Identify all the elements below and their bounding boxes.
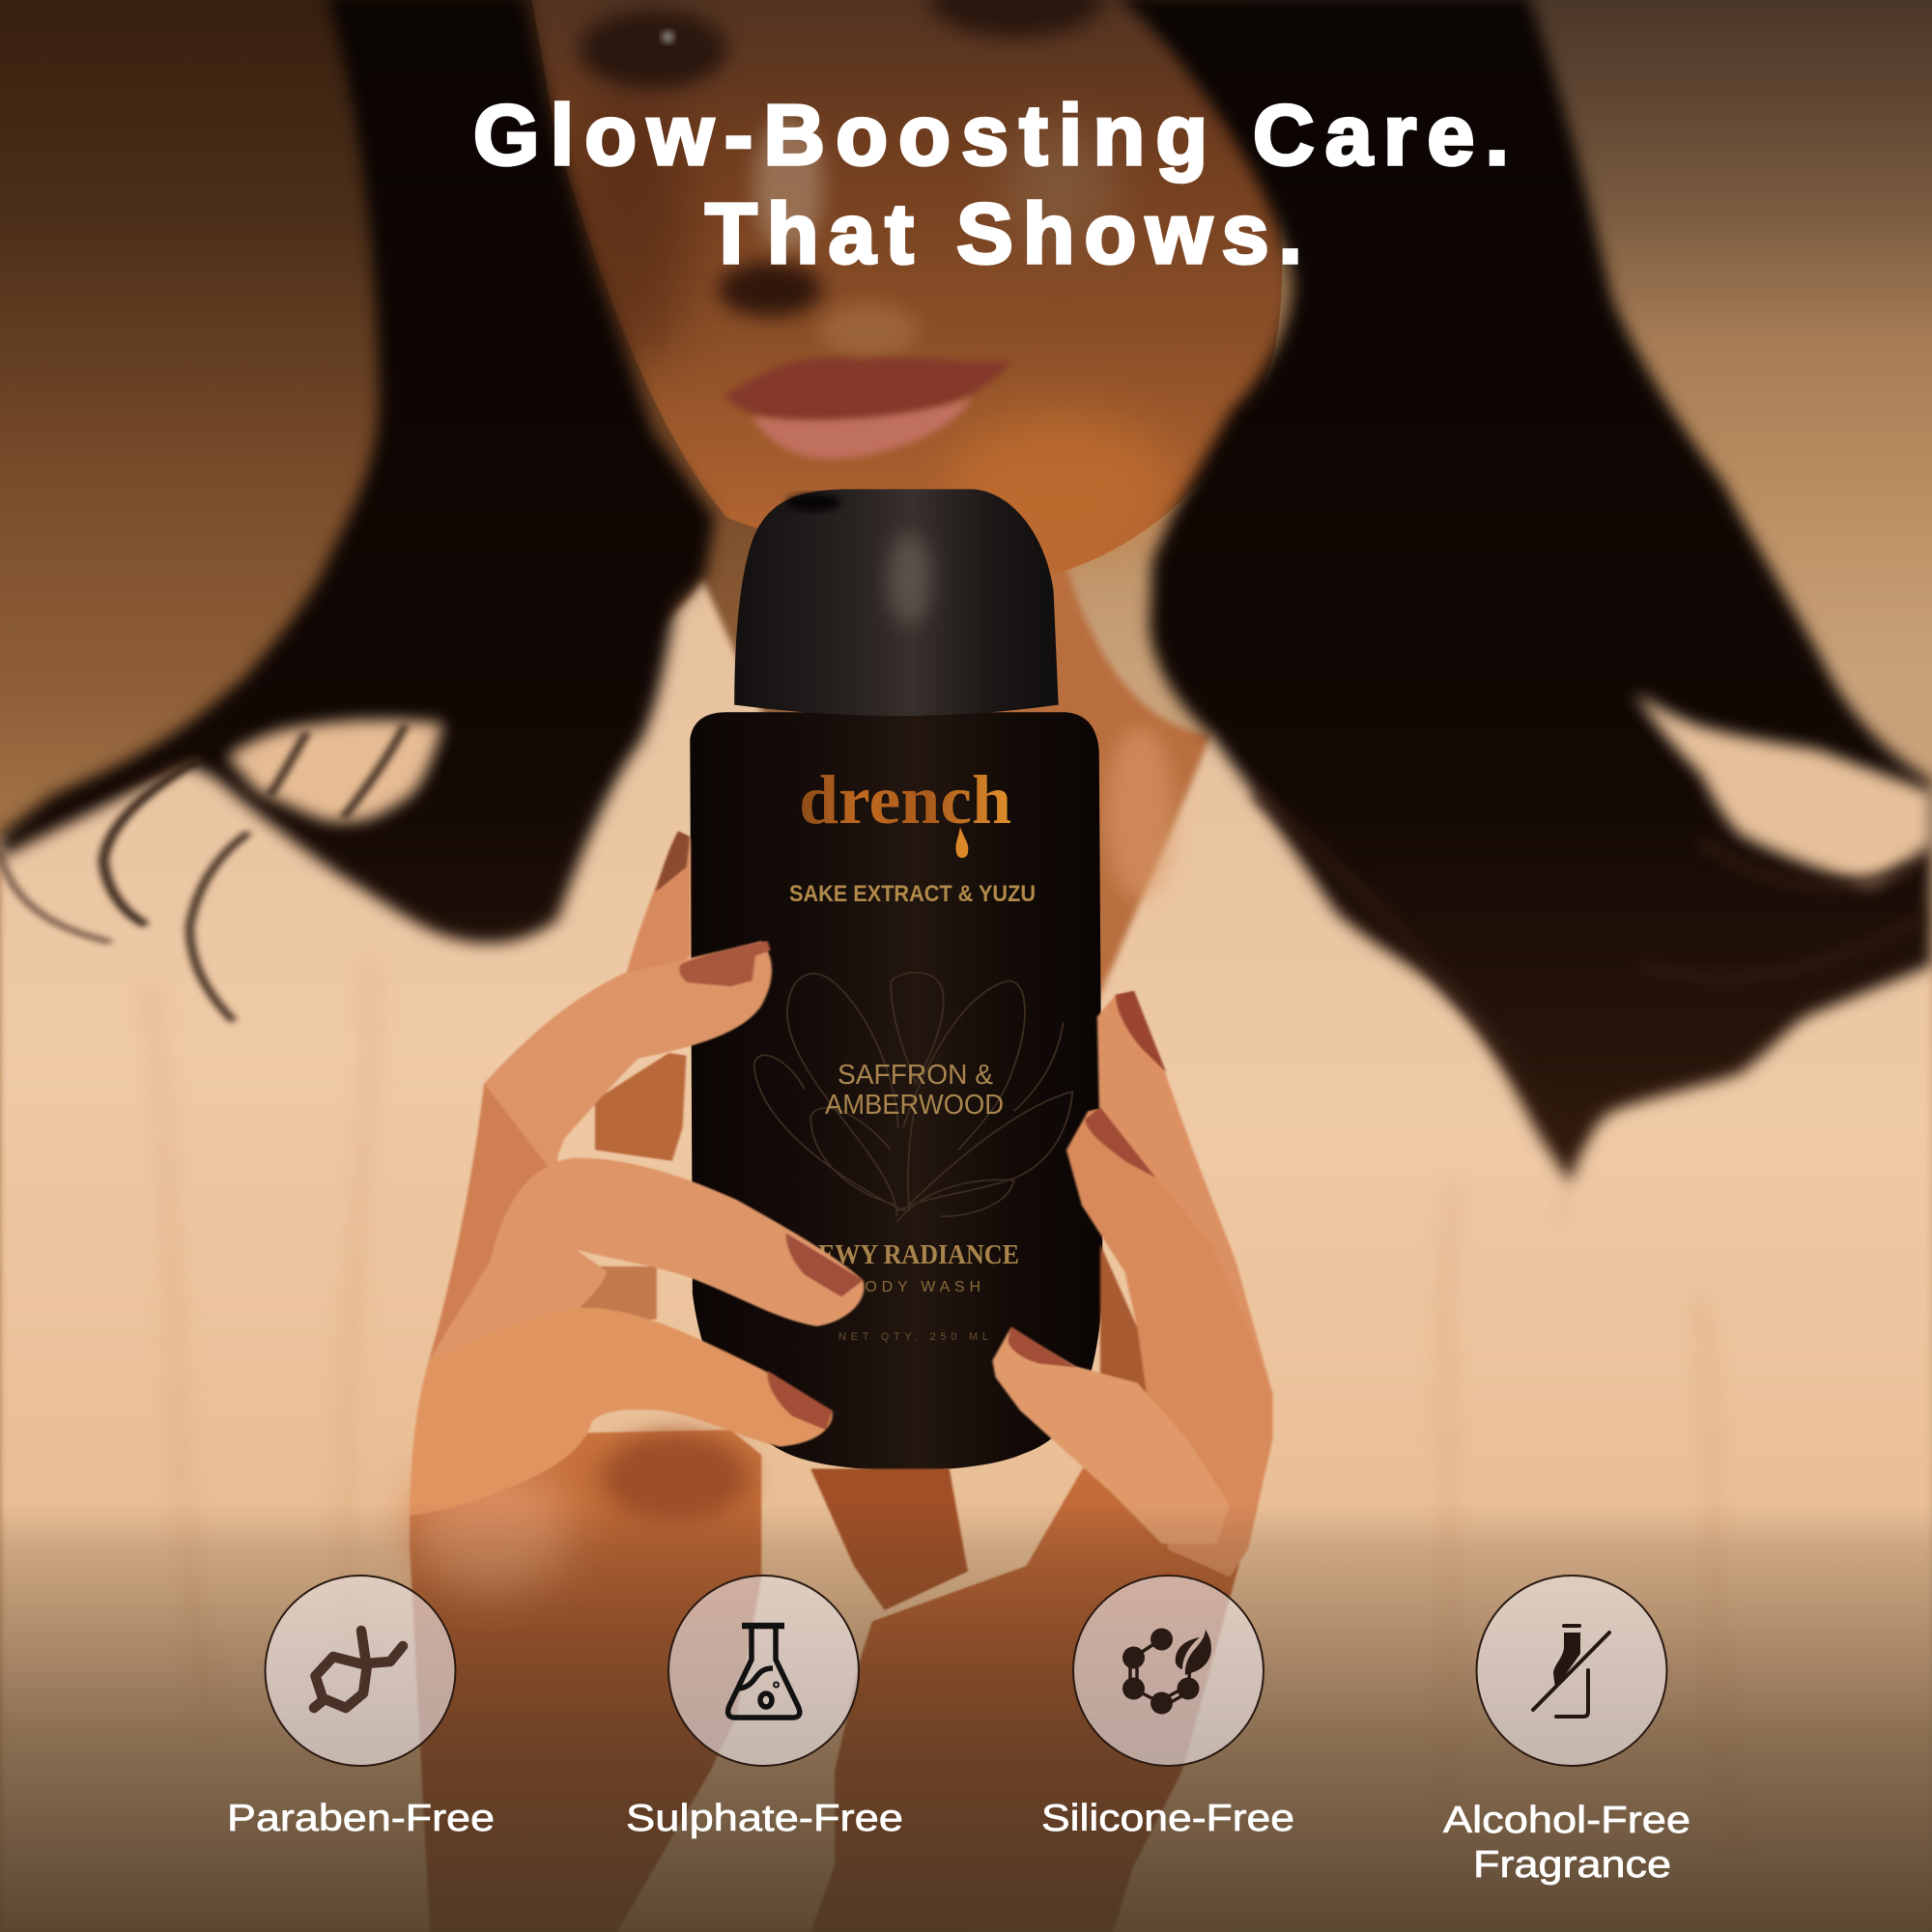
left ring finger <box>411 1308 833 1516</box>
badge circle <box>668 1576 859 1766</box>
icon: molecule with leaf <box>1122 1629 1211 1714</box>
label: Paraben-Free <box>227 1798 495 1839</box>
feature: silicone-free <box>1041 1576 1294 1839</box>
right hand lower palm <box>810 1438 1273 1932</box>
feature: sulphate-free <box>626 1576 903 1839</box>
right hand shadow <box>1100 1244 1180 1438</box>
left ring nail <box>767 1371 833 1430</box>
product type: BODY WASH <box>850 1279 980 1295</box>
right hair gap showing robe <box>1634 693 1932 886</box>
badge circle <box>1476 1576 1667 1766</box>
bottle <box>690 489 1103 1470</box>
right hair mass <box>1115 0 1932 1227</box>
neck and chest <box>788 493 1210 1060</box>
bottle label text <box>789 761 1036 1343</box>
badge circle <box>265 1576 456 1766</box>
face <box>529 0 1282 579</box>
feature: alcohol-free fragrance <box>1443 1576 1690 1886</box>
right middle finger <box>1066 1108 1273 1577</box>
icon: molecule <box>314 1631 403 1708</box>
brand name: drench <box>799 761 1011 838</box>
left hand lower palm <box>410 1430 761 1932</box>
right lower nail <box>1008 1326 1075 1367</box>
fragrance line 1: SAFFRON & <box>838 1060 993 1091</box>
finger behind bottle with long nail <box>626 831 691 978</box>
net quantity: NET QTY. 250 ML <box>838 1331 988 1343</box>
left hand back <box>429 1083 558 1361</box>
finger under bottle <box>810 1468 968 1610</box>
title line 1: Glow-Boosting Care. <box>473 87 1509 183</box>
right lower finger <box>992 1327 1230 1544</box>
title <box>473 87 1509 281</box>
white robe <box>0 579 1932 1932</box>
right hair highlights <box>1256 792 1922 1140</box>
icon: crossed-out bottle <box>1533 1624 1609 1717</box>
right upper finger <box>1097 992 1273 1438</box>
feature: paraben-free <box>227 1576 495 1839</box>
right middle nail <box>1085 1107 1155 1178</box>
label line 2: Fragrance <box>1473 1844 1671 1886</box>
label: Sulphate-Free <box>626 1798 903 1839</box>
bottle body <box>690 712 1103 1470</box>
left index nail <box>679 941 771 986</box>
ingredient line: SAKE EXTRACT & YUZU <box>789 881 1036 907</box>
label: Silicone-Free <box>1041 1798 1294 1839</box>
hair <box>0 0 1932 1227</box>
left hair gap showing robe <box>227 720 443 822</box>
finger behind index <box>595 1053 686 1161</box>
lips <box>724 357 1012 423</box>
hands holding bottle <box>410 831 1273 1932</box>
icon: flask <box>728 1626 800 1718</box>
label line 1: Alcohol-Free <box>1443 1800 1690 1841</box>
saffron flower line art <box>754 973 1072 1222</box>
brand drip <box>955 827 968 858</box>
bottle cap <box>734 489 1059 716</box>
fragrance line 2: AMBERWOOD <box>825 1090 1004 1121</box>
product name: DEWY RADIANCE <box>800 1239 1019 1270</box>
left hair mass <box>0 0 715 943</box>
left hair wisps <box>0 727 404 1019</box>
badge circle <box>1073 1576 1264 1766</box>
left middle finger <box>429 1158 865 1361</box>
left middle nail <box>786 1234 863 1297</box>
bottom shade <box>0 1503 1932 1932</box>
title line 2: That Shows. <box>705 185 1302 281</box>
right upper nail <box>1116 991 1166 1072</box>
left index finger <box>484 941 772 1172</box>
